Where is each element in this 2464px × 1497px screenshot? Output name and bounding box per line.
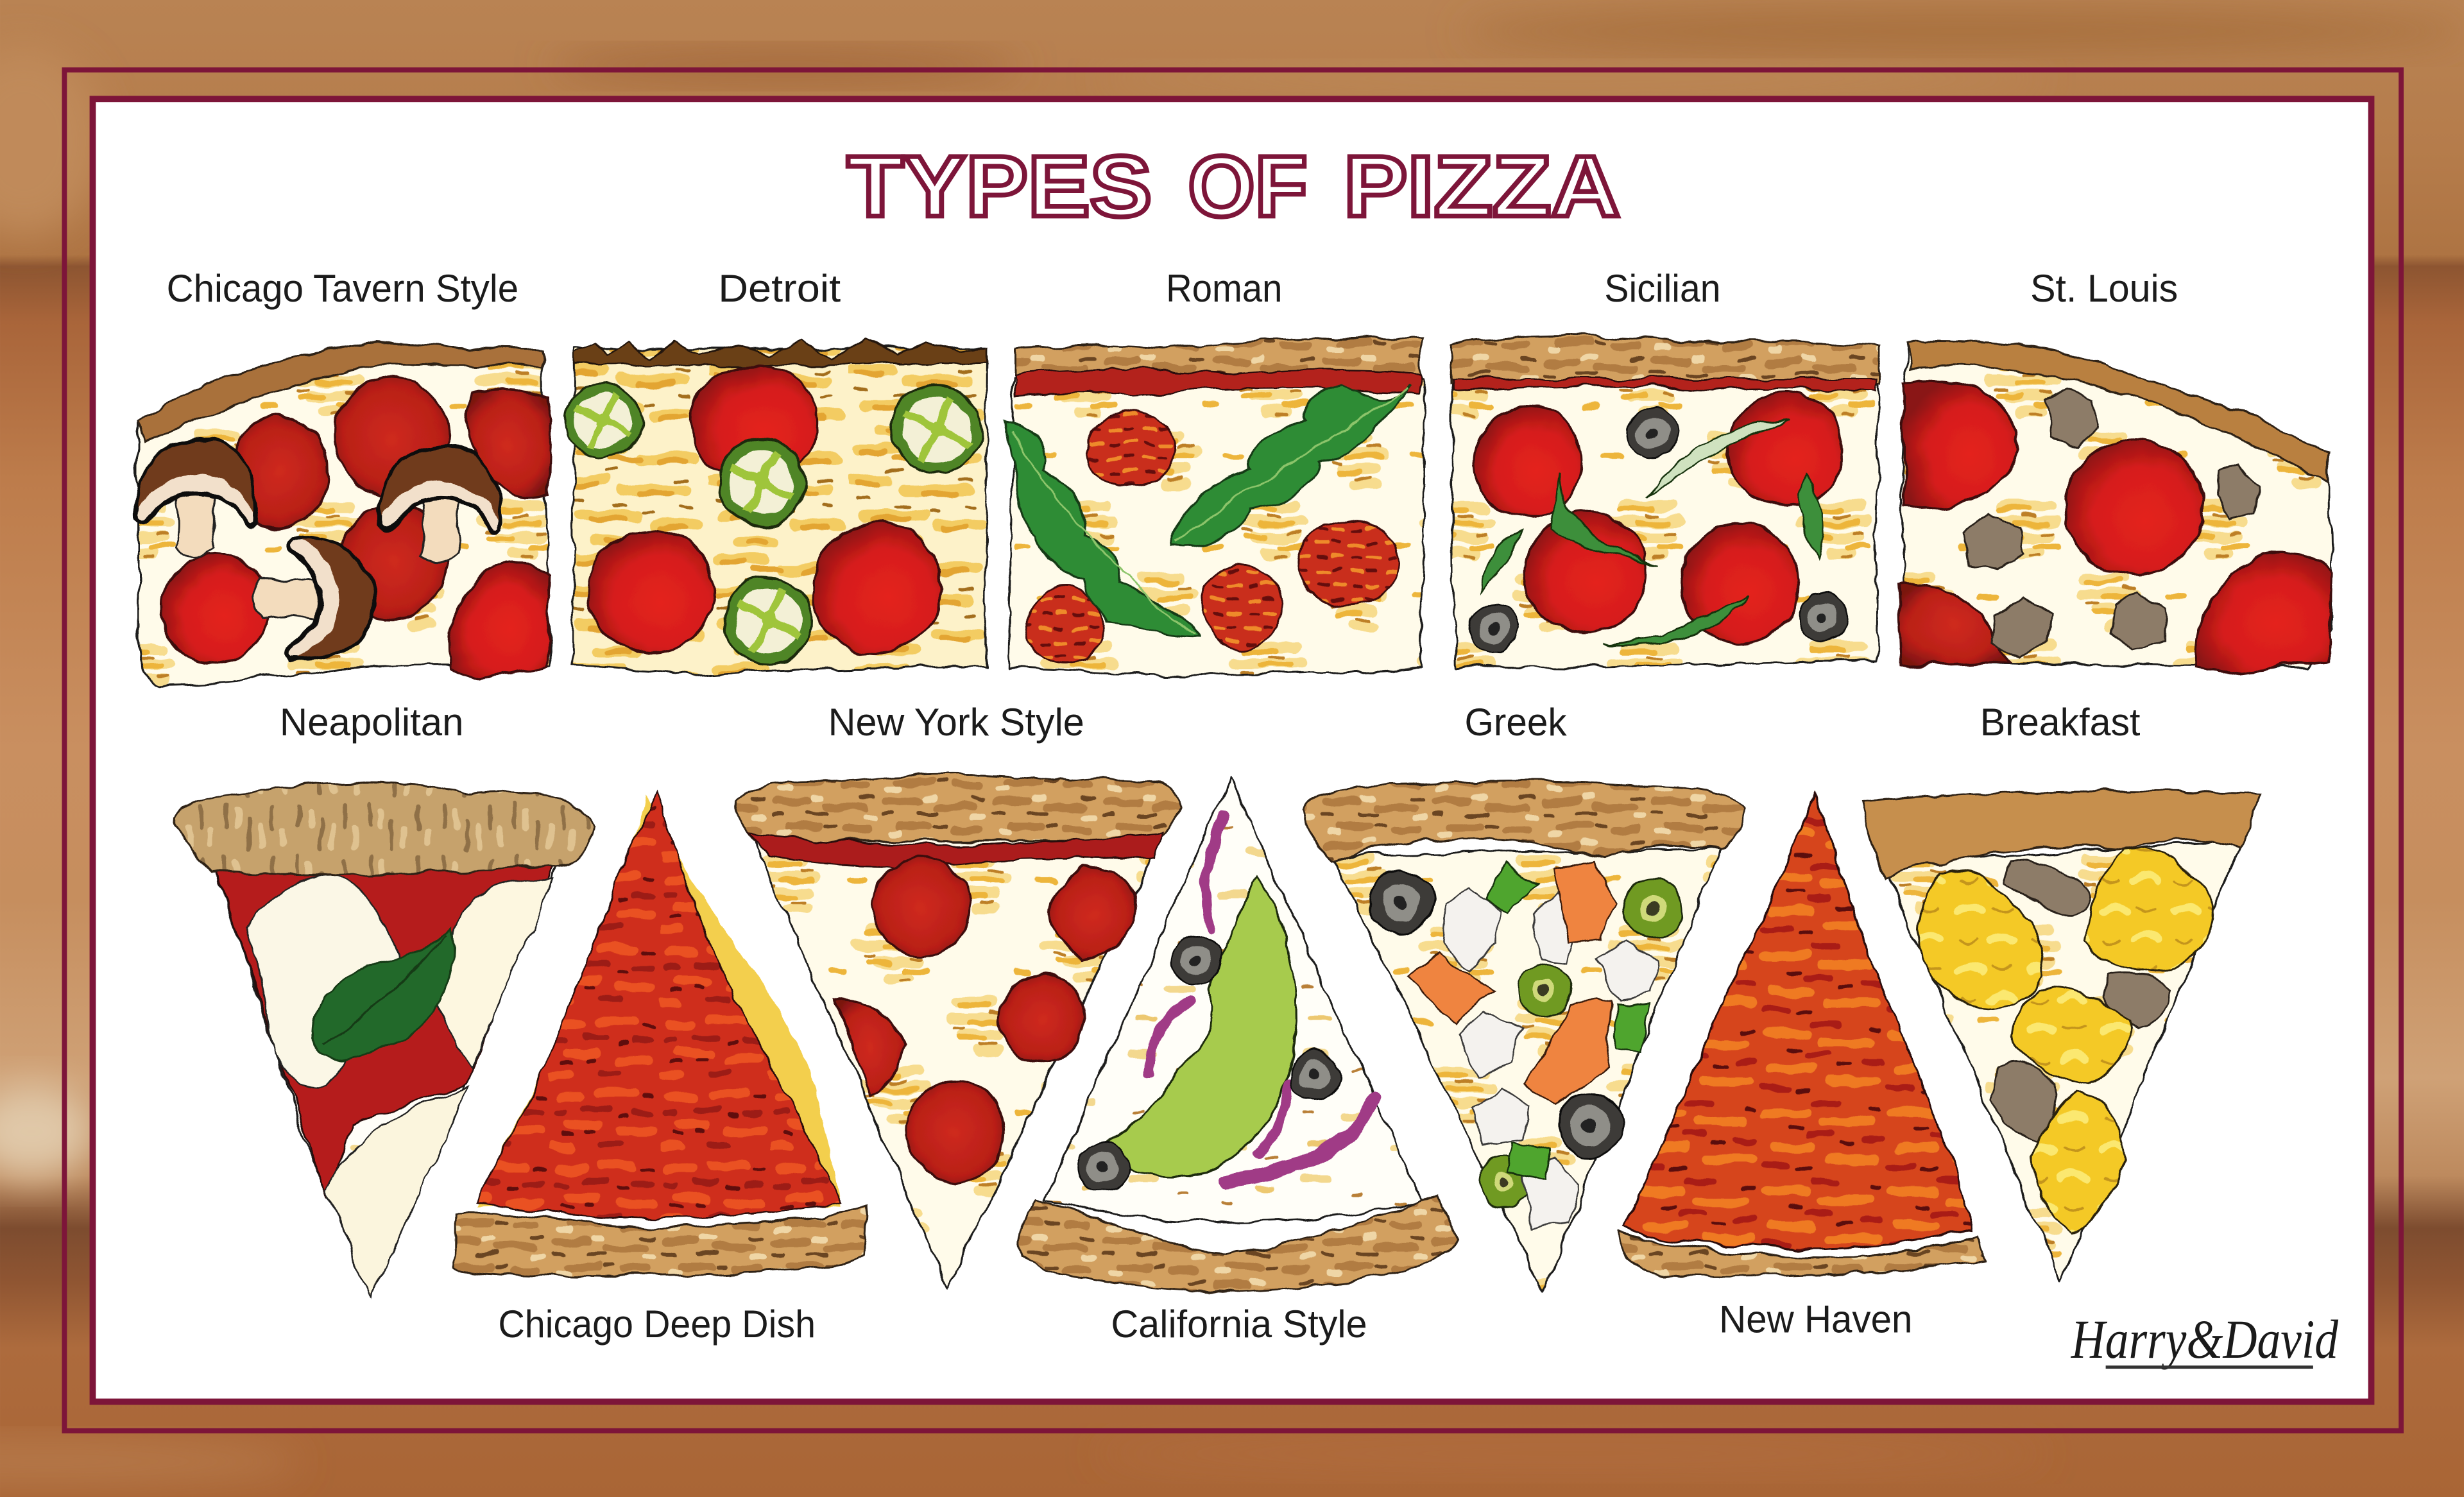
sausage crumbles — [1964, 388, 2260, 657]
green olive — [1623, 878, 1683, 938]
green olive — [1518, 963, 1571, 1017]
salmon pieces — [1410, 860, 1616, 1108]
basil leaf — [313, 927, 453, 1061]
label: Chicago Deep Dish: Chicago Deep Dish — [498, 1303, 816, 1346]
meatball — [1088, 412, 1176, 487]
red onion slices — [1150, 814, 1375, 1182]
meatball — [1026, 588, 1105, 663]
olive — [1172, 935, 1222, 985]
pizza: St. Louis — [1898, 341, 2332, 672]
pizza: Greek — [1305, 782, 1744, 1293]
mushroom — [380, 447, 500, 562]
label: New Haven: New Haven — [1719, 1298, 1912, 1341]
jalapeno slice — [724, 577, 812, 665]
green olive — [1478, 1156, 1529, 1207]
label: New York Style: New York Style — [828, 701, 1084, 744]
mushroom sideways — [253, 539, 375, 659]
green pepper pieces — [1485, 864, 1650, 1179]
label: Greek: Greek — [1464, 701, 1568, 744]
logo: Harry & David: Harry&David — [2071, 1309, 2339, 1370]
arugula leaf — [1005, 421, 1197, 638]
olive — [1628, 409, 1679, 459]
scrambled egg — [2012, 986, 2130, 1084]
label: California Style: California Style — [1111, 1303, 1367, 1346]
olive — [1078, 1142, 1128, 1193]
scrambled egg — [1919, 871, 2043, 1009]
label: St. Louis: St. Louis — [2030, 267, 2178, 310]
avocado — [1097, 877, 1296, 1175]
sausage crumbles — [1992, 860, 2171, 1141]
feta crumbles — [1442, 888, 1658, 1229]
scrambled egg — [2083, 848, 2213, 971]
black olive — [1371, 871, 1433, 934]
black olive — [1559, 1093, 1621, 1156]
label: Detroit: Detroit — [718, 267, 841, 310]
meatball — [1298, 520, 1399, 605]
pizza: Roman — [1005, 338, 1424, 675]
jalapeno slice — [893, 385, 980, 473]
pizza: Chicago Tavern Style — [137, 343, 550, 685]
meatball — [1202, 564, 1281, 649]
pizza: Chicago Deep Dish — [456, 789, 868, 1276]
mushroom — [137, 440, 257, 556]
pizza: Breakfast — [1862, 791, 2260, 1281]
jalapeno slice — [718, 438, 806, 526]
title — [847, 138, 1620, 235]
pizza: Detroit — [566, 339, 987, 676]
green herb strips — [1480, 420, 1825, 644]
pizza: California Style — [1020, 778, 1459, 1292]
label: Roman: Roman — [1166, 267, 1282, 310]
title: OF — [1188, 138, 1308, 235]
olive — [1469, 603, 1519, 654]
olive — [1798, 592, 1848, 643]
label: Chicago Tavern Style: Chicago Tavern Style — [167, 267, 518, 310]
olive — [1290, 1050, 1340, 1100]
pizza: New York Style — [735, 774, 1182, 1288]
pizza: Neapolitan — [176, 782, 594, 1298]
label: Sicilian: Sicilian — [1604, 267, 1721, 310]
jalapeno slice — [566, 384, 641, 459]
pizza: New Haven — [1618, 795, 1985, 1277]
title: TYPES — [847, 138, 1152, 235]
thick crust — [176, 782, 594, 875]
arugula leaf — [1170, 385, 1411, 546]
pizza: Sicilian — [1450, 336, 1879, 668]
scrambled egg — [2030, 1092, 2125, 1233]
label: Neapolitan: Neapolitan — [280, 701, 463, 744]
title: PIZZA — [1344, 138, 1620, 235]
label: Breakfast: Breakfast — [1980, 701, 2141, 744]
